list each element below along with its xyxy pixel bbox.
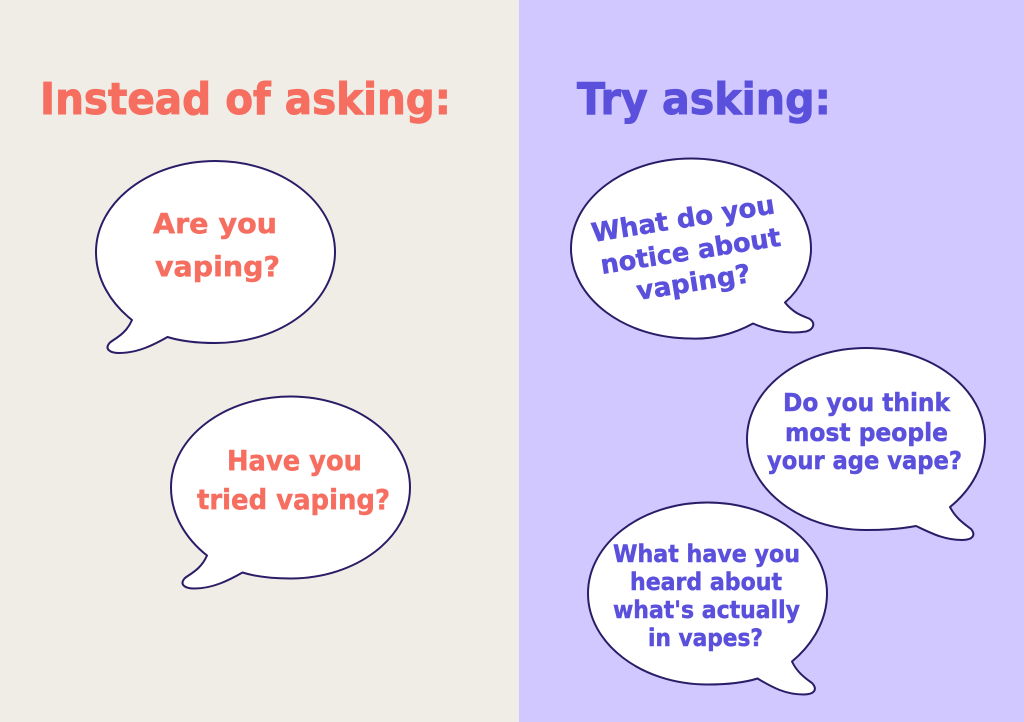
speech bubble: what do you notice about vaping: What do you [589,190,777,249]
heading: try asking: Try asking: [577,74,831,125]
speech bubble: are you vaping [96,161,335,353]
speech bubble: do you think most people your age vape [747,348,985,540]
speech bubble: what do you notice about vaping: notice about [598,223,783,281]
speech bubble: are you vaping: Are you [153,207,277,240]
panel: instead of asking background [0,0,519,722]
speech bubble: what do you notice about vaping: vaping? [634,259,753,307]
speech bubble: do you think most people your age vape: your age vape? [767,446,962,475]
speech bubble: do you think most people your age vape: most people [785,418,948,447]
speech bubble: what have you heard about what's actually in vapes: in vapes? [648,624,763,652]
speech bubble: what have you heard about what's actually in vapes [588,502,827,694]
speech bubble: have you tried vaping: tried vaping? [197,483,390,516]
heading: instead of asking: Instead of asking: [40,74,451,125]
speech bubble: are you vaping: vaping? [155,250,280,283]
speech bubble: have you tried vaping: Have you [227,444,362,477]
speech bubble: have you tried vaping [171,396,410,588]
panel: try asking background [519,0,1024,722]
speech bubble: do you think most people your age vape: Do you think [783,388,951,417]
speech bubble: what have you heard about what's actually in vapes: heard about [630,568,782,596]
speech bubble: what have you heard about what's actually in vapes: What have you [613,540,800,568]
speech bubble: what do you notice about vaping [571,158,813,339]
speech bubble: what have you heard about what's actually in vapes: what's actually [613,596,800,624]
